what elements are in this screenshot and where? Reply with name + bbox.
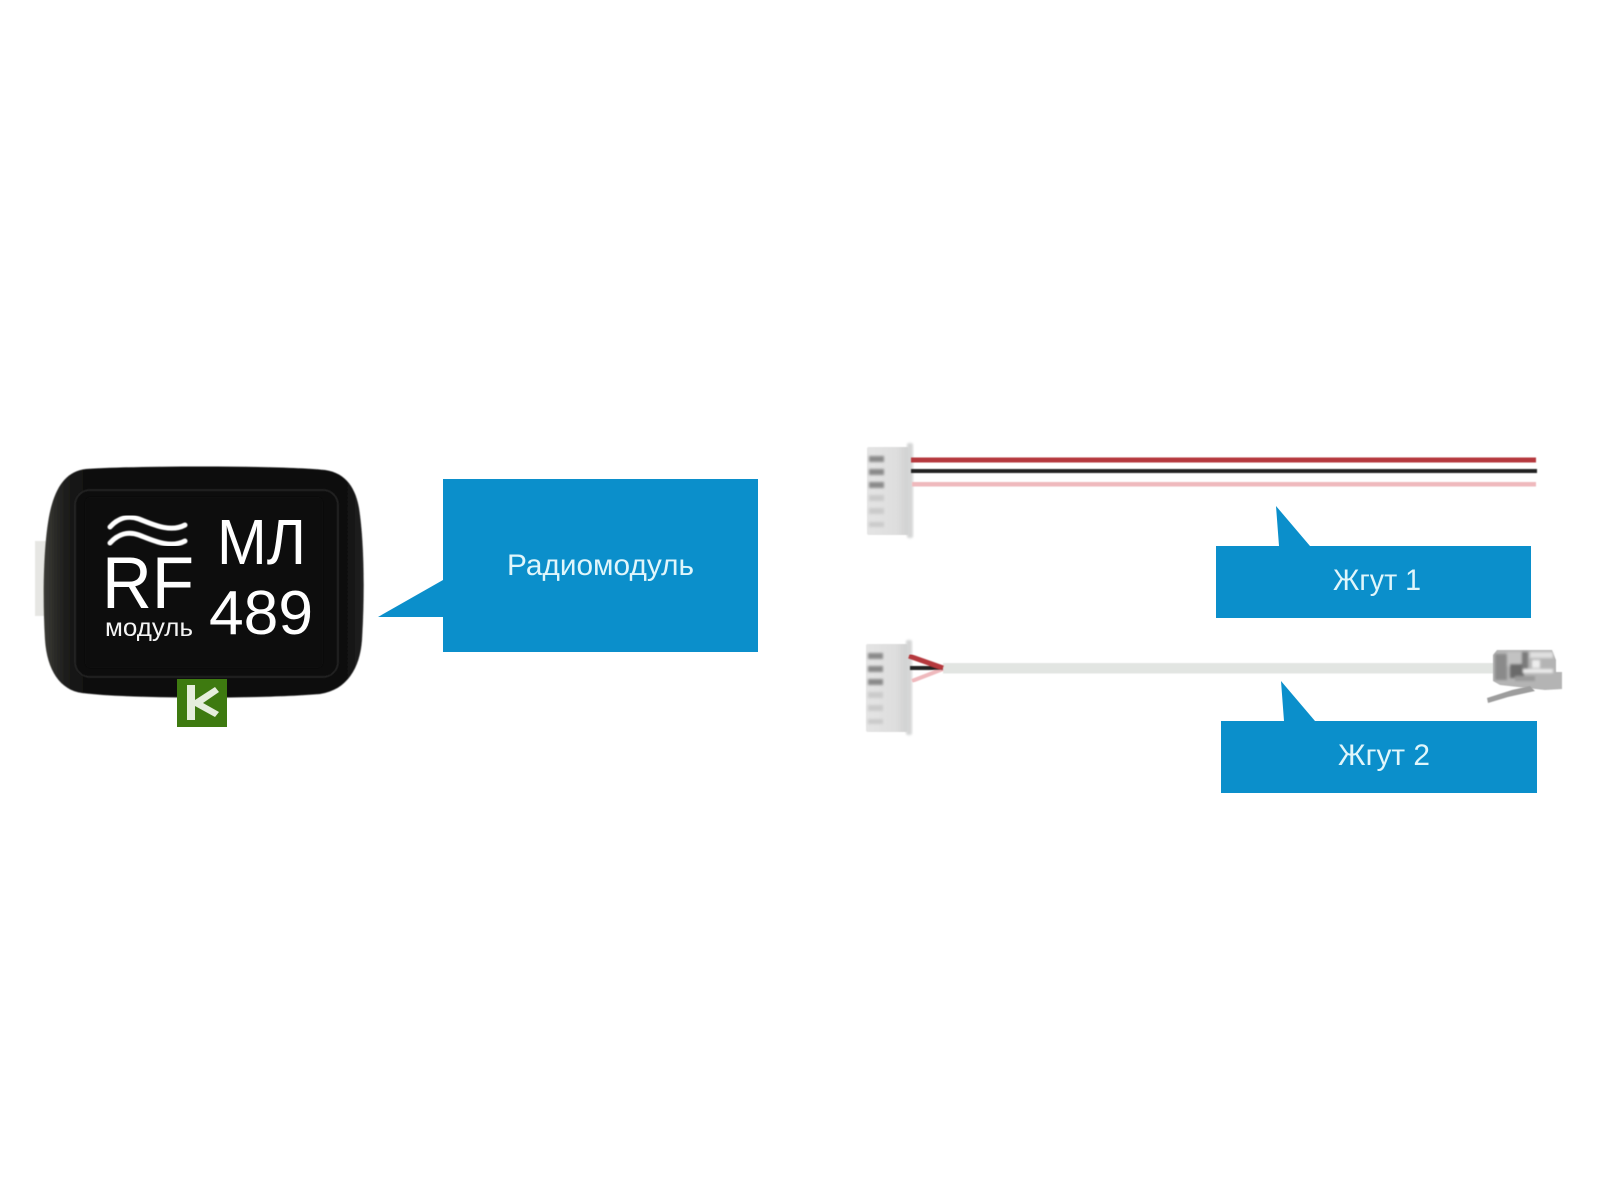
callout: radio module <box>378 479 758 652</box>
radio module device <box>35 466 364 698</box>
RJ plug <box>1487 650 1562 703</box>
callout: harness 2 <box>1221 681 1537 793</box>
modul label: модуль <box>105 614 193 642</box>
front panel <box>85 497 323 668</box>
callout: harness 1 <box>1216 506 1531 618</box>
side clip <box>35 541 47 616</box>
fan-out wires <box>909 656 943 681</box>
callout: harness 1: Жгут 1 <box>1333 564 1421 597</box>
callout: harness 2: Жгут 2 <box>1338 739 1430 772</box>
panel bevel <box>75 490 338 677</box>
flat cable <box>943 663 1495 674</box>
RF label: RF <box>102 543 194 624</box>
callout: radio module: Радиомодуль <box>507 549 694 582</box>
model name: МЛ <box>217 506 306 578</box>
harness 2 <box>866 640 1562 735</box>
green K badge <box>177 679 227 727</box>
model number: 489 <box>209 579 313 648</box>
wires 1 <box>911 458 1537 486</box>
connector 1 <box>867 443 913 538</box>
harness 1 <box>867 443 1537 538</box>
device body <box>44 466 364 698</box>
connector 2 <box>866 640 912 735</box>
RF waves icon <box>110 517 185 544</box>
